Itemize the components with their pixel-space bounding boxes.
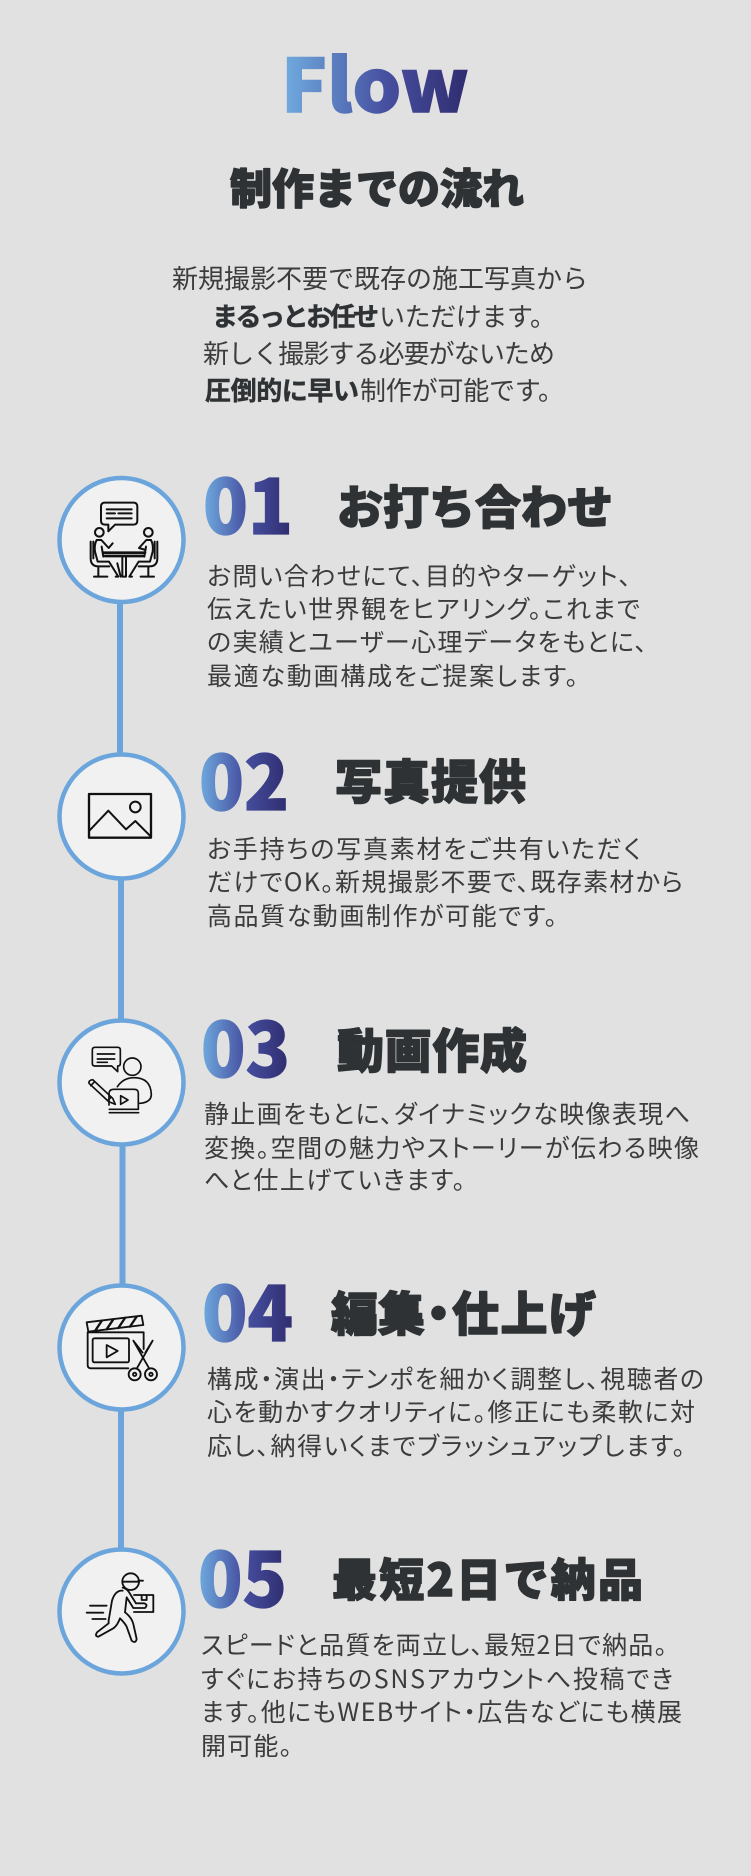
description: 高品質な動画制作が可能です。 xyxy=(207,897,557,933)
intro text block: 新規撮影不要で既存の施工写真から xyxy=(172,259,588,296)
panel: step 05 xyxy=(60,1520,682,1763)
number 03: 03 xyxy=(201,990,290,1099)
panel: step 04 xyxy=(60,1254,704,1463)
intro text block: 制作が可能です。 xyxy=(360,371,564,408)
intro text block xyxy=(172,259,588,408)
description xyxy=(207,1360,704,1463)
timeline connector 4-5 xyxy=(118,1409,124,1551)
intro text block: 新しく撮影する必要がないため xyxy=(203,334,555,371)
icon: clapperboard and scissors xyxy=(87,1316,157,1380)
number 05: 05 xyxy=(198,1520,287,1629)
heading: 編集・仕上げ: 編集 xyxy=(331,1276,425,1345)
description: へと仕上げていきます。 xyxy=(204,1161,465,1197)
icon: photo xyxy=(89,794,151,838)
panel: step 02 xyxy=(60,723,683,933)
description: すぐにお持ちのSNSアカウントへ投稿でき xyxy=(201,1660,673,1696)
description: 心を動かすクオリティに。修正にも柔軟に対 xyxy=(207,1393,695,1429)
description: 伝えたい世界観をヒアリング。これまで xyxy=(207,590,640,626)
timeline connector 1-2 xyxy=(117,600,123,756)
description: の実績とユーザー心理データをもとに、 xyxy=(207,623,647,659)
heading: 編集・仕上げ: 仕上げ xyxy=(452,1276,596,1345)
description: 構成・演出・テンポを細かく調整し、視聴者の xyxy=(207,1360,704,1396)
circle: step 03 xyxy=(60,1020,184,1144)
heading: 写真提供: 写真提供 xyxy=(335,744,526,813)
heading: 最短2日で納品: 最短2日で納品 xyxy=(332,1544,643,1609)
circle: step 01 xyxy=(60,478,184,602)
description xyxy=(204,1095,699,1197)
number 02: 02 xyxy=(199,723,289,832)
description: お手持ちの写真素材をご共有いただく xyxy=(207,830,641,866)
panel: step 03 xyxy=(60,990,699,1197)
description: 静止画をもとに、ダイナミックな映像表現へ xyxy=(204,1095,690,1131)
description: 応し、納得いくまでブラッシュアップします。 xyxy=(207,1427,685,1463)
timeline connector 2-3 xyxy=(118,878,124,1022)
description: お問い合わせにて、目的やターゲット、 xyxy=(207,557,631,593)
circle: step 04 xyxy=(60,1286,184,1410)
intro text block: まるっとお任せ xyxy=(212,297,379,334)
description xyxy=(207,830,683,933)
number 01: 01 xyxy=(203,447,293,556)
heading: 編集・仕上げ: ・ xyxy=(415,1276,462,1345)
number 04: 04 xyxy=(202,1254,293,1363)
panel: step 01 xyxy=(60,447,647,693)
description: だけでOK。新規撮影不要で、既存素材から xyxy=(207,863,683,899)
timeline connector 3-4 xyxy=(120,1144,126,1287)
description xyxy=(207,557,647,693)
circle: step 02 xyxy=(60,754,184,878)
intro text block: いただけます。 xyxy=(379,297,556,334)
icon: creator with laptop xyxy=(89,1047,151,1113)
heading: 動画作成: 動画作成 xyxy=(337,1013,527,1082)
description xyxy=(201,1626,682,1763)
icon: delivery runner xyxy=(87,1573,153,1642)
circle: step 05 xyxy=(60,1550,184,1674)
icon: meeting at table xyxy=(91,503,157,577)
title: Flow: Flow xyxy=(281,28,469,134)
description: 最適な動画構成をご提案します。 xyxy=(207,657,578,693)
description: スピードと品質を両立し、最短2日で納品。 xyxy=(201,1626,667,1662)
description: 変換。空間の魅力やストーリーが伝わる映像 xyxy=(204,1129,699,1165)
description: ます。他にもWEBサイト・広告などにも横展 xyxy=(201,1693,682,1729)
intro text block: 圧倒的に早い xyxy=(205,371,359,408)
description: 開可能。 xyxy=(201,1727,292,1763)
heading: 制作までの流れ: 制作までの流れ xyxy=(230,156,524,217)
heading: 編集・仕上げ xyxy=(331,1276,596,1345)
heading: お打ち合わせ: お打ち合わせ xyxy=(337,472,613,538)
